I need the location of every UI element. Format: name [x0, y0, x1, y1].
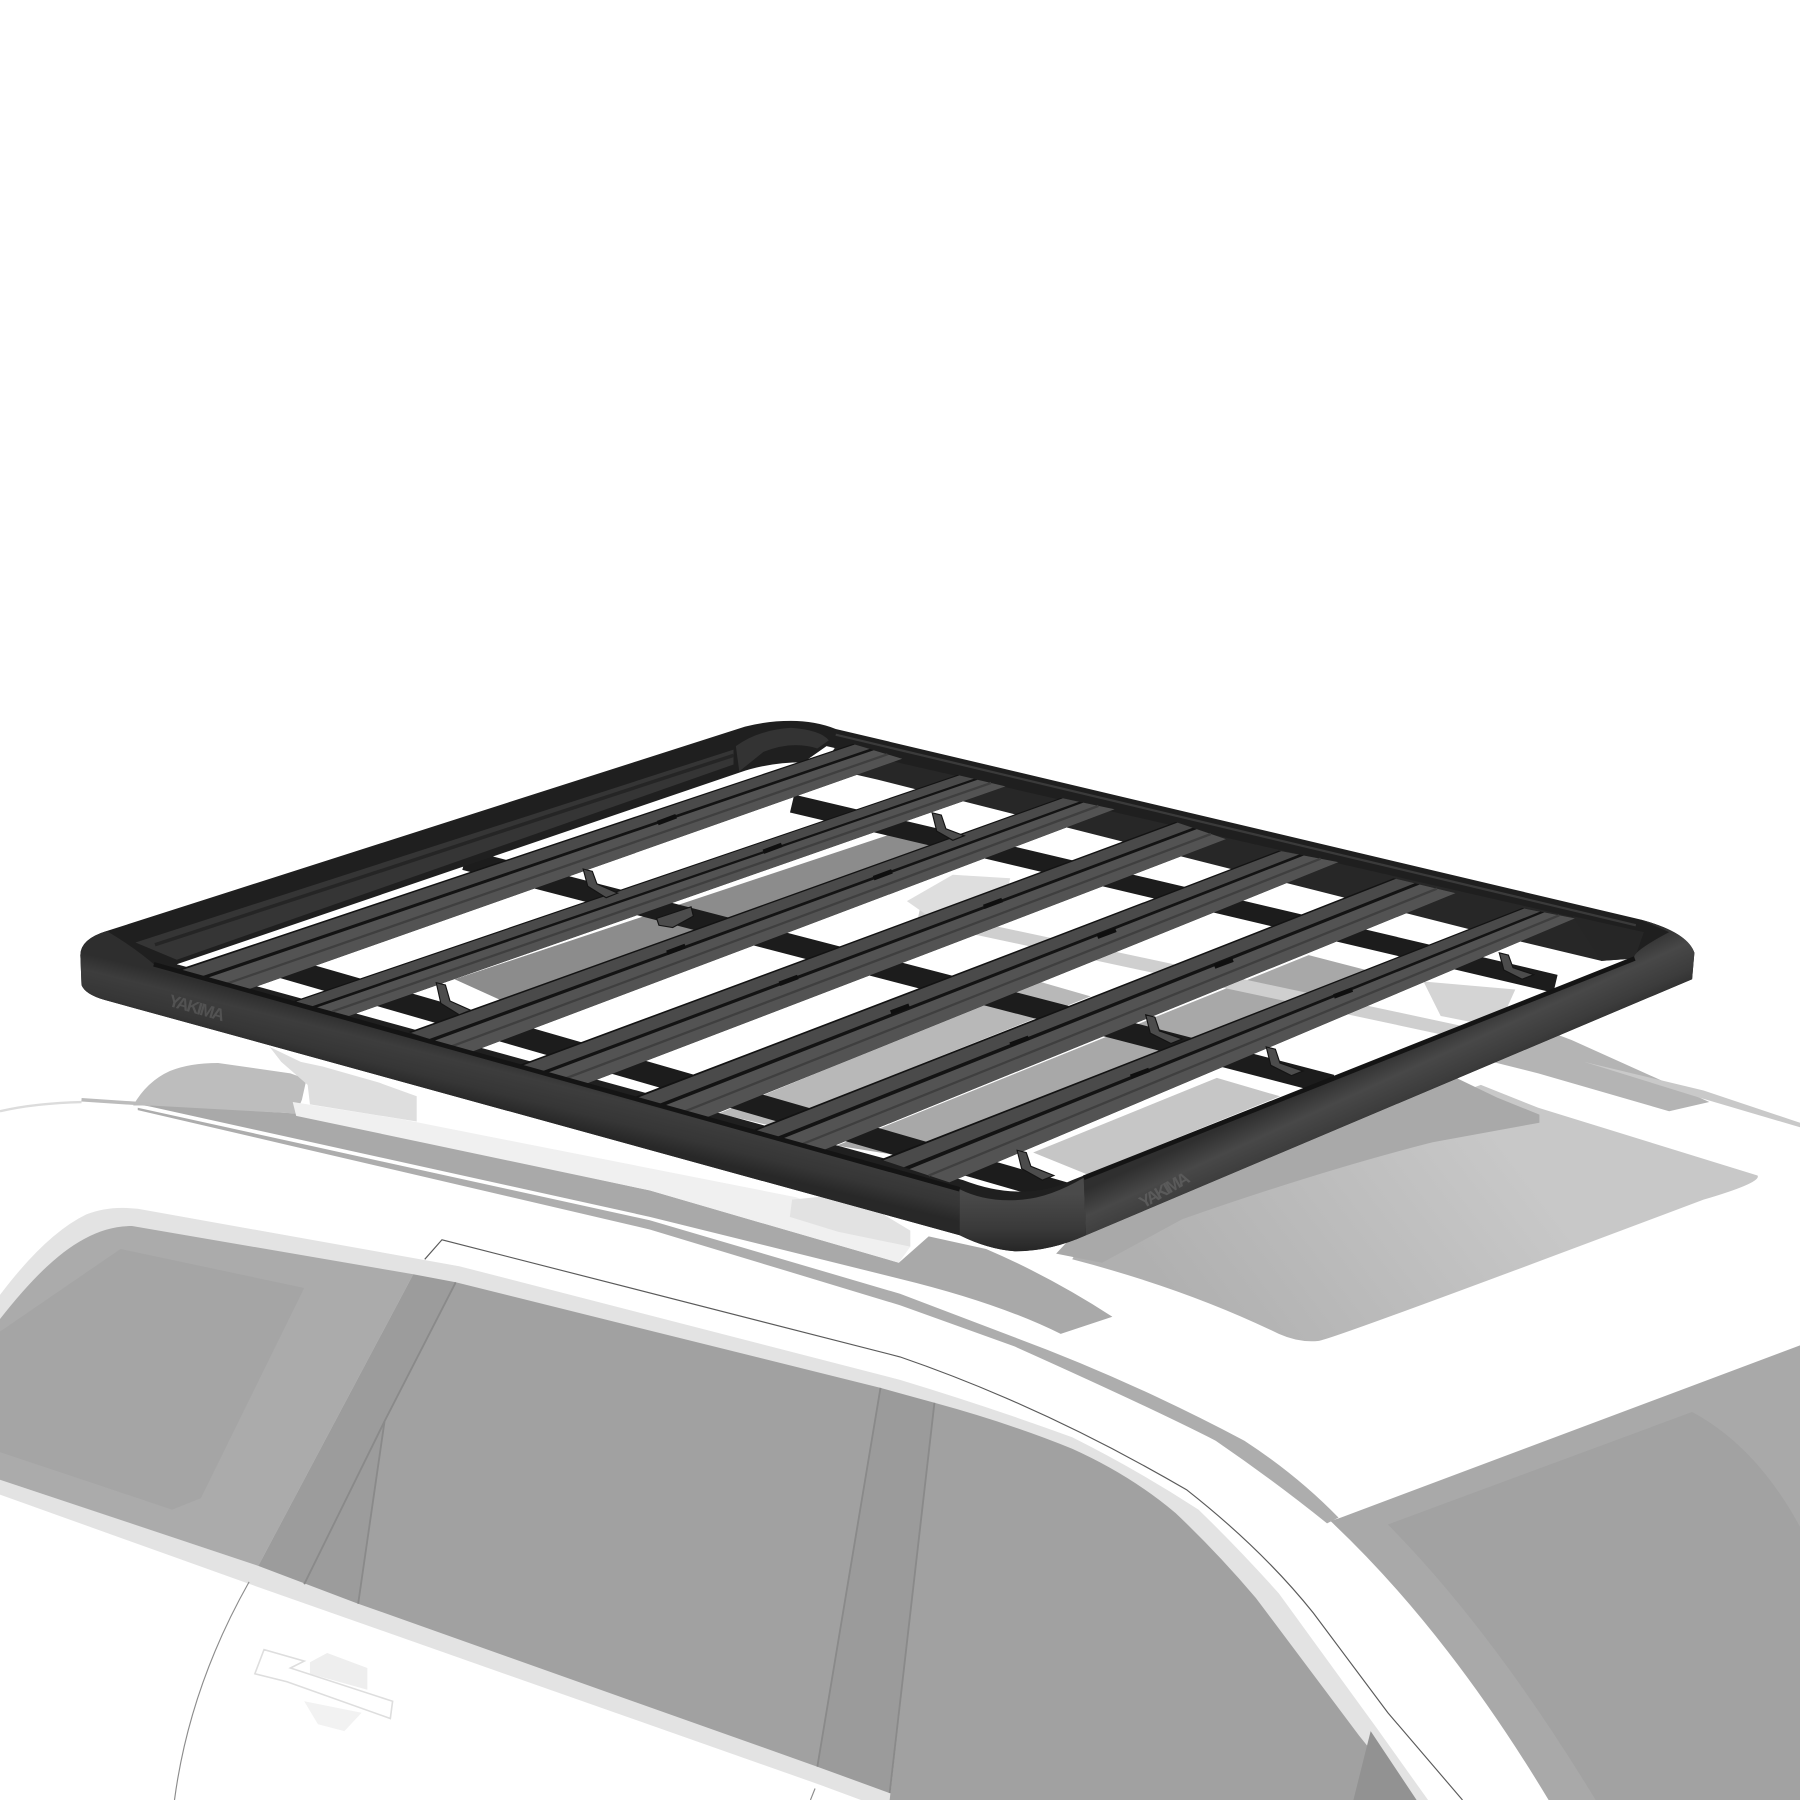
side windows: [0, 1226, 1417, 1800]
slat mounting brackets: [436, 813, 1534, 1180]
tube edge lines: [154, 959, 1635, 1189]
pane in slot 6-7: [837, 955, 1366, 1155]
handle recess lower: [304, 1701, 362, 1731]
front-left rack tube: [80, 931, 960, 1235]
door lines: [174, 1582, 815, 1800]
front corner of rack: [960, 1178, 1086, 1251]
handle recess upper: [310, 1653, 367, 1690]
rack back frame ring: [80, 721, 1694, 1251]
rear door window: [358, 1282, 880, 1767]
front door window: [890, 1403, 1411, 1800]
left roof rail plate: [293, 1102, 910, 1263]
car body with roof details: [0, 1010, 1800, 1800]
right roof edge line: [1584, 1062, 1800, 1127]
rack slats: [177, 744, 1575, 1182]
rail end mount: [790, 1194, 910, 1247]
right tower: [1423, 982, 1515, 1027]
slat 7: [880, 908, 1575, 1182]
front-right rack tube: [1084, 920, 1694, 1235]
back bar highlight: [836, 735, 1636, 925]
slat 1: [177, 744, 902, 990]
handle body: [255, 1650, 393, 1718]
left roof rail shadow: [133, 1103, 1112, 1334]
slat 5: [630, 851, 1339, 1118]
front slot sunroof pane: [1033, 1078, 1280, 1174]
roof panel outline: [425, 1240, 1463, 1800]
shadow of rack on sunroof: [1056, 1068, 1539, 1263]
rear pillar: [258, 1274, 456, 1604]
middle pillar: [817, 1388, 934, 1793]
left tower foot: [270, 1047, 417, 1122]
dark sunroof pane in slot 2-3: [455, 829, 953, 1002]
logo: left tube: YAKIMA: [166, 990, 227, 1025]
crossbar A: [792, 804, 1555, 984]
crossbar C: [276, 965, 1068, 1194]
sunroof glass: [1072, 1085, 1758, 1341]
center tower: [907, 875, 1010, 925]
mirror pillar triangle: [1353, 1731, 1417, 1800]
left channel groove: [155, 755, 734, 945]
objects visible through the rack: [455, 829, 1515, 1174]
left channel inner face: [135, 750, 734, 960]
right roof rail shadow: [1469, 1010, 1709, 1111]
pillar seams: [304, 1282, 934, 1793]
roof bar seen through rack: [918, 916, 1492, 1039]
right back gusset: [1573, 916, 1644, 961]
left tower shadow: [133, 1063, 307, 1114]
logo: right tube: YAKIMA: [1135, 1167, 1193, 1212]
crossbar B: [465, 860, 1332, 1085]
rack back ledge and crossbars: [276, 735, 1630, 1194]
back ledge: [822, 735, 1630, 961]
windshield: [1330, 1345, 1800, 1800]
quarter window inner tint: [0, 1249, 304, 1510]
door handle: [255, 1650, 393, 1731]
rear roof shaded band: [138, 1108, 1339, 1523]
slat clips: [658, 816, 1352, 1077]
window trim (chrome surround): [0, 1208, 1428, 1800]
pane in slot 5-6: [719, 982, 1091, 1125]
slat 2: [294, 775, 1006, 1016]
slat 4: [515, 822, 1226, 1084]
slat 3: [409, 798, 1115, 1053]
back corner surface: [736, 728, 829, 771]
thin lower rail line: [82, 1100, 150, 1104]
slat 6: [754, 878, 1456, 1150]
windshield inner tint: [1388, 1412, 1800, 1800]
rear quarter window: [0, 1226, 413, 1566]
thin roof edge line: [0, 1102, 82, 1111]
